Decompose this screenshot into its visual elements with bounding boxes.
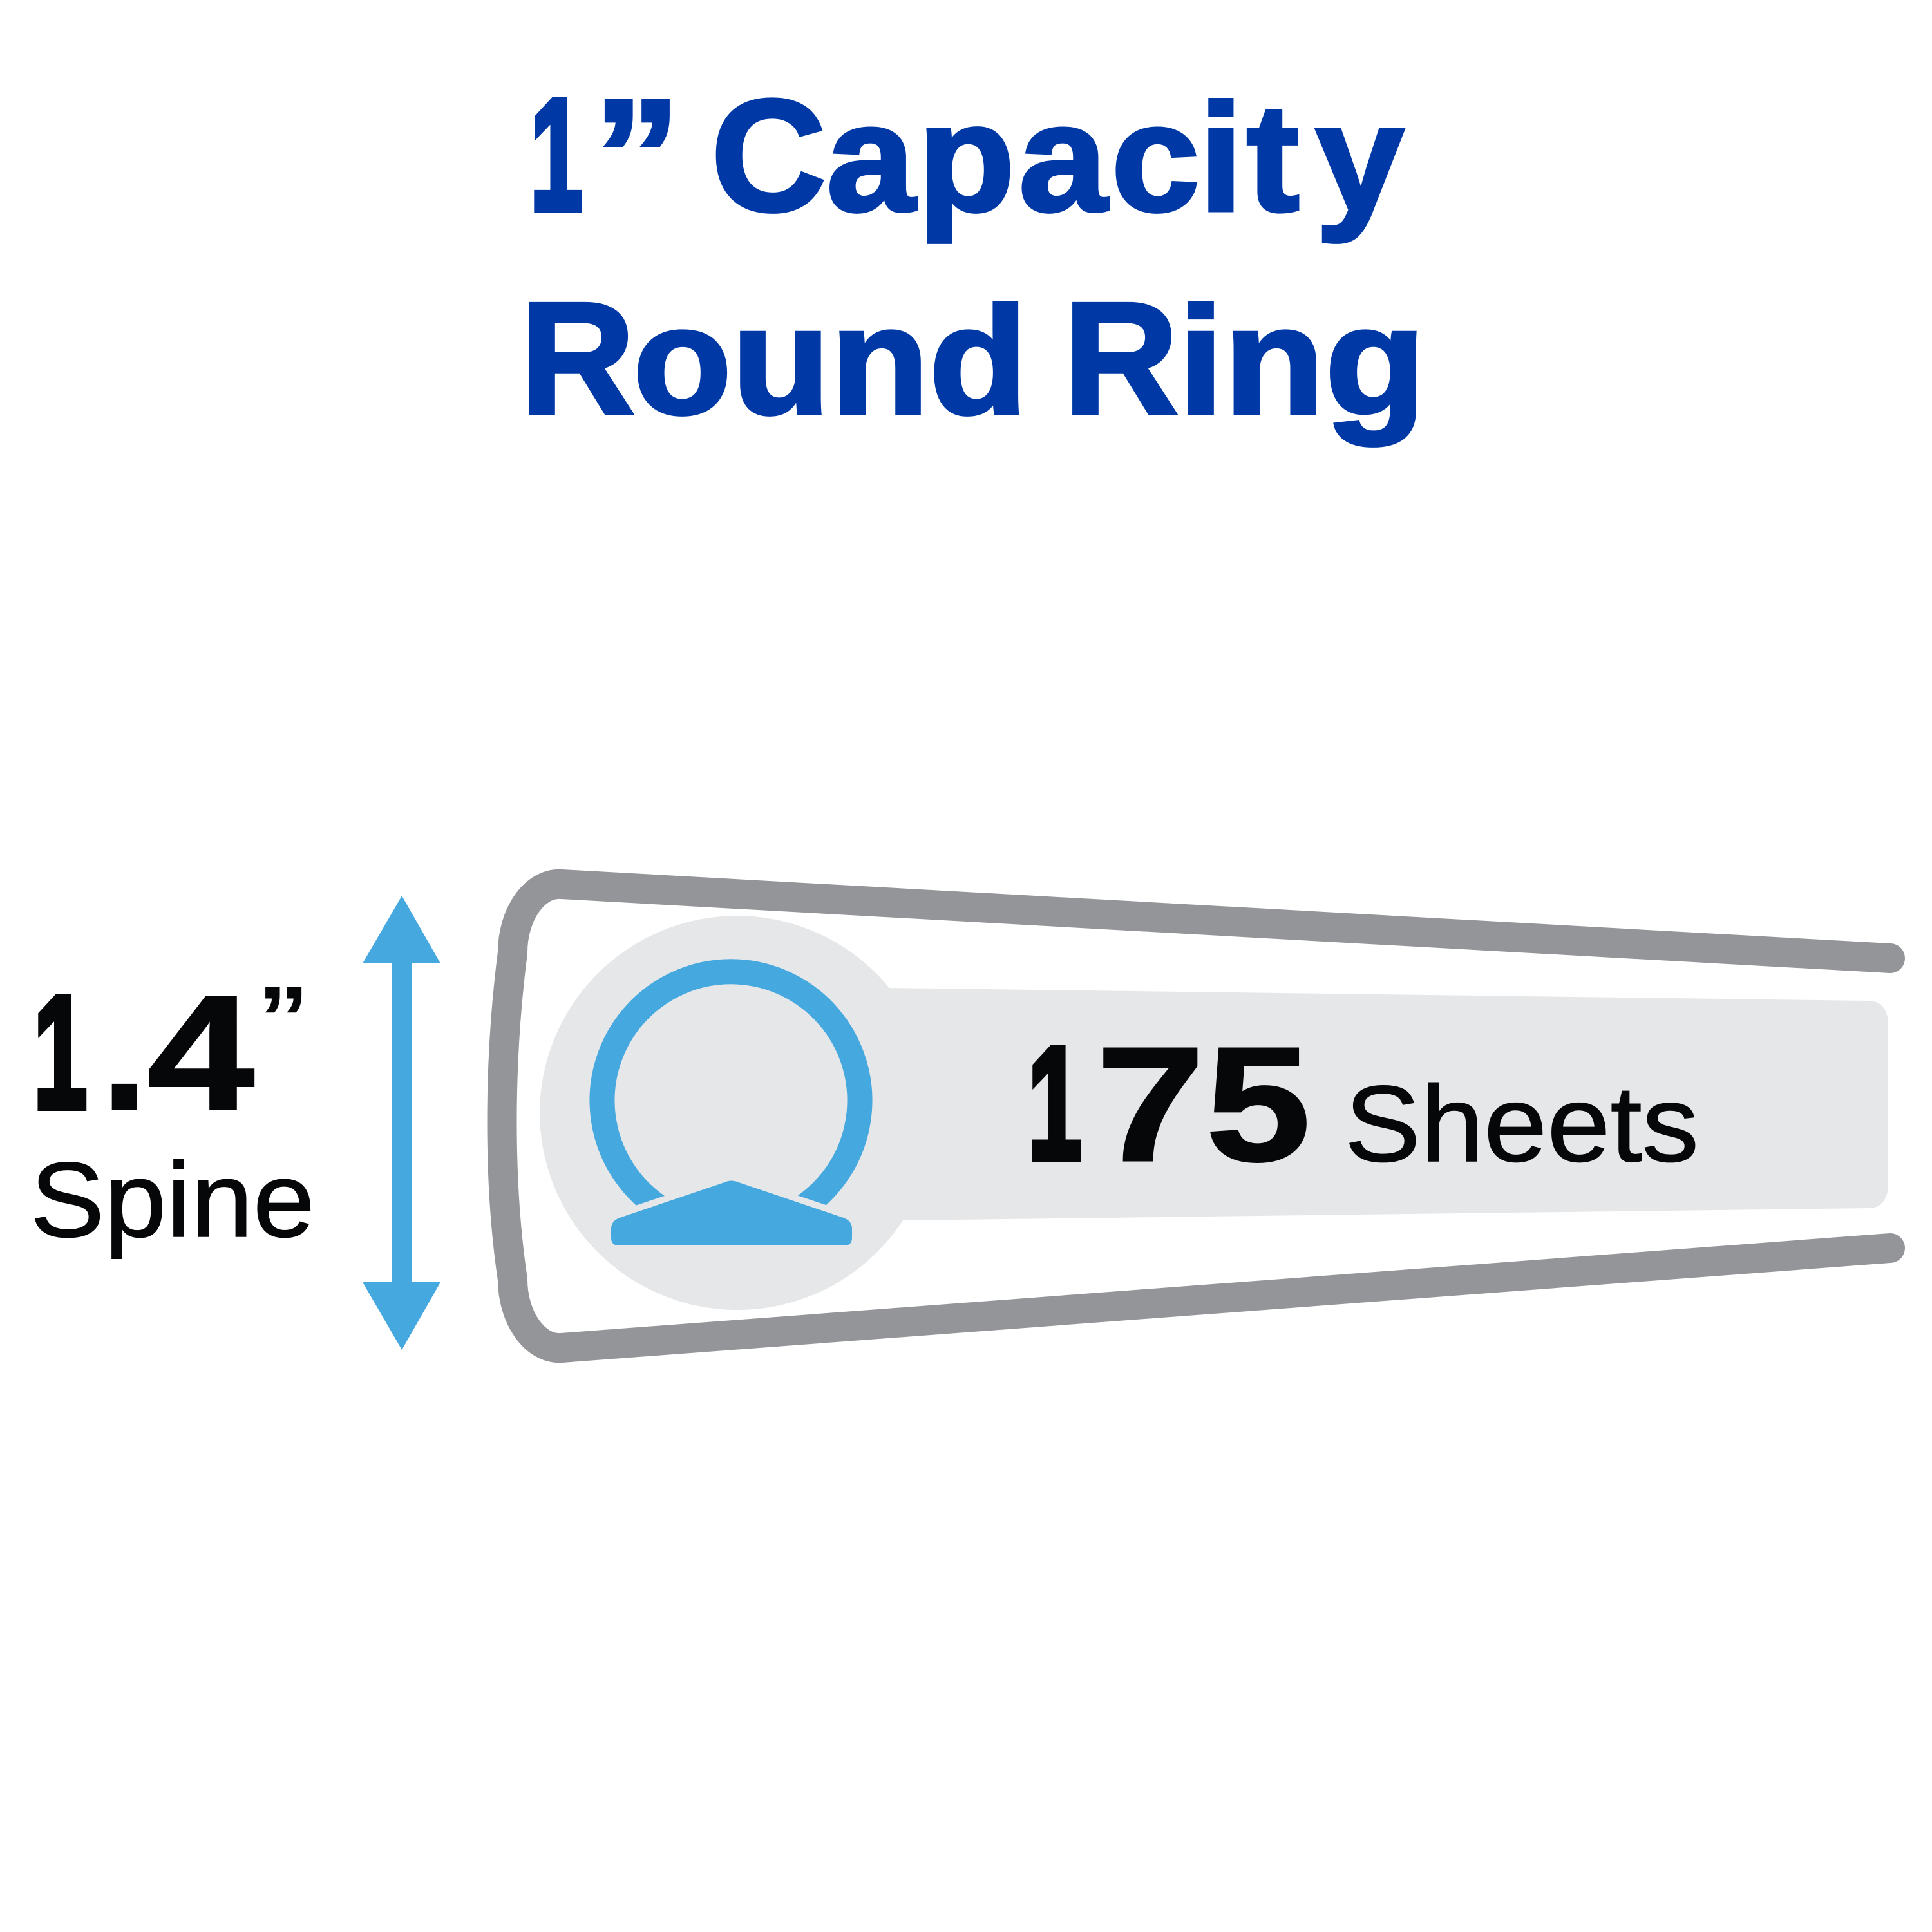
spine value: 1 <box>33 961 87 1142</box>
title line: capacity: apacity <box>826 72 1404 243</box>
sheet count: 5 <box>1206 1014 1311 1195</box>
spine caption: Spine <box>30 1141 315 1259</box>
spine value: . <box>102 961 147 1144</box>
title line: ring type <box>520 269 1426 448</box>
sheet count: 7 <box>1096 1014 1205 1195</box>
title line: capacity: 1 <box>530 66 583 243</box>
arrow: spine height <box>363 896 440 1350</box>
sheet count: 1 <box>1028 1013 1081 1193</box>
title line: ring type: R <box>520 269 635 448</box>
sheet count <box>1028 1013 1311 1195</box>
title <box>520 66 1426 448</box>
inch mark: ” <box>258 967 309 1068</box>
ring arc <box>602 972 860 1210</box>
binder outline <box>502 884 1890 1348</box>
sheet capacity label <box>1028 1013 1699 1195</box>
icon: round ring <box>599 972 864 1245</box>
sheets caption: Sheets <box>1345 1063 1699 1184</box>
title line: capacity: C <box>711 66 826 245</box>
ring base <box>611 1181 852 1245</box>
spine value: 4 <box>147 961 256 1144</box>
title line: ring type: ound <box>633 276 1028 446</box>
spine value <box>33 961 256 1144</box>
sheet capacity tab <box>540 916 1888 1310</box>
title line: capacity <box>530 66 1404 245</box>
title line: capacity: ” <box>593 66 681 245</box>
title line: ring type: R <box>1063 269 1179 448</box>
spine measurement label <box>30 961 315 1259</box>
title line: ring type: ing <box>1178 276 1426 446</box>
